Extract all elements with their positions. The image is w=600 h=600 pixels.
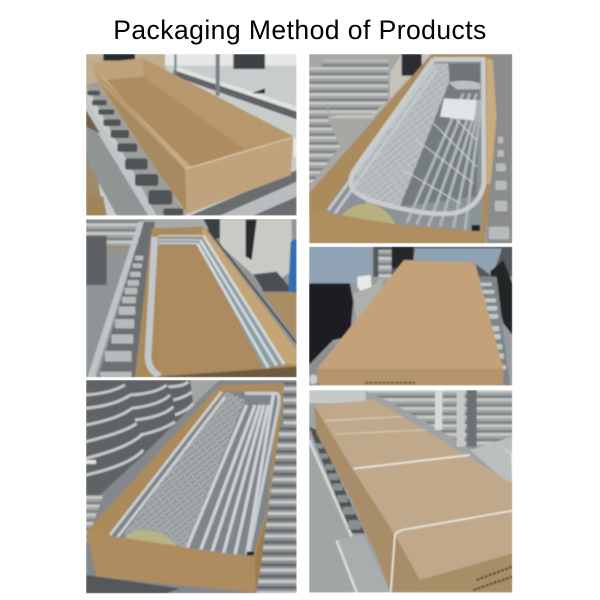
photo: closed carton on conveyor with workers: [309, 247, 512, 386]
photo: strapped cartons on conveyor: [309, 390, 512, 593]
photo: tubes and mesh in carton: [309, 54, 512, 243]
photo: empty carton on conveyor: [86, 54, 297, 216]
photo: mesh and tubes in carton beside stacked coils: [86, 380, 297, 593]
photo: tubes laid in carton: [86, 219, 297, 377]
title: Packaging Method of Products: [113, 15, 487, 45]
